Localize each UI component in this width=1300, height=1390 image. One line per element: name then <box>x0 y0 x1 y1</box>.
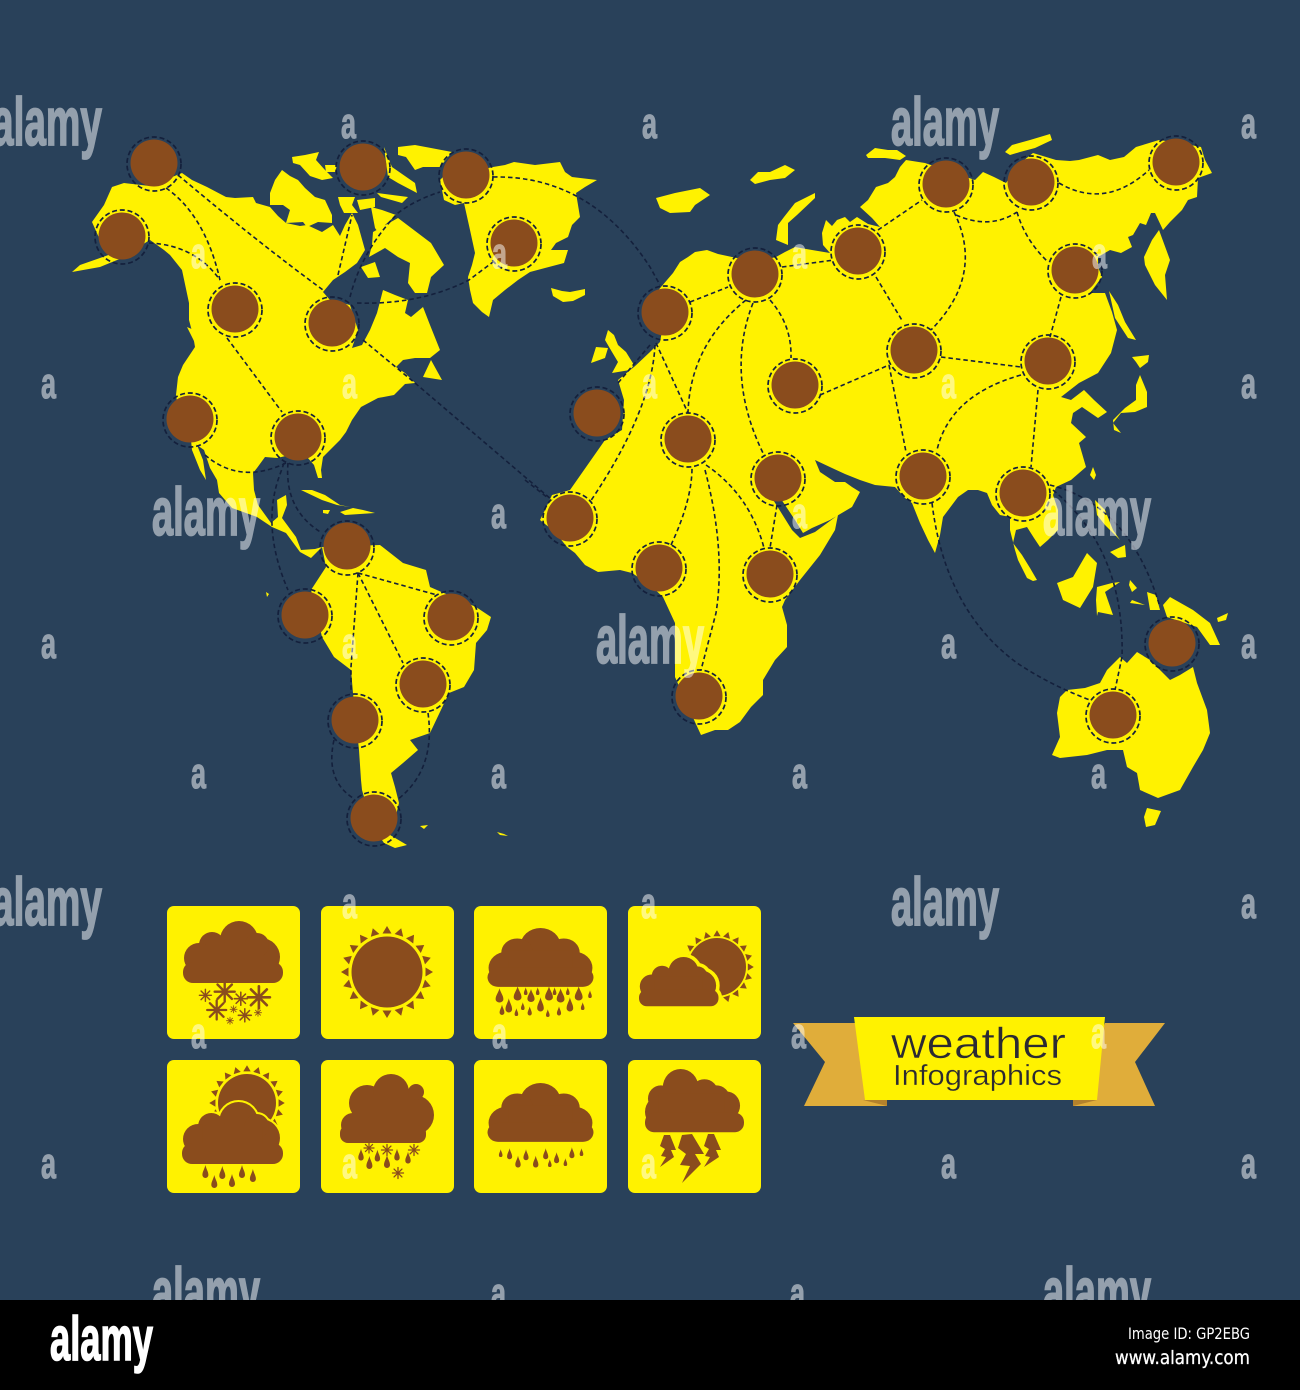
watermark: small a marks: a <box>191 749 206 798</box>
landmass: Novaya Zemlya <box>776 193 815 245</box>
icon tile: sun <box>321 906 454 1039</box>
landmass: North America <box>72 173 440 558</box>
watermark: small a marks: a <box>791 1009 806 1058</box>
watermark: small a marks: a <box>641 1139 656 1188</box>
landmass: Southeast Asian islands <box>1057 500 1160 616</box>
landmass: Baja California <box>191 440 206 480</box>
banner left tail <box>793 1023 887 1106</box>
landmass: South America <box>311 545 491 848</box>
banner centre <box>854 1017 1105 1100</box>
world map <box>72 134 1228 848</box>
dashed connection routes <box>149 170 1160 800</box>
footer website: www.alamy.com <box>1115 1347 1250 1369</box>
watermark: small a marks: a <box>941 619 956 668</box>
watermark: small a marks: a <box>342 619 357 668</box>
landmass: Canadian Arctic islands <box>270 145 452 380</box>
watermark: small a marks: a <box>492 229 507 278</box>
weather icon grid <box>167 906 761 1193</box>
watermark: small a marks: a <box>191 229 206 278</box>
watermark: small a marks: a <box>1091 1009 1106 1058</box>
watermark: small a marks: a <box>1241 879 1256 928</box>
landmass: Greenland <box>440 162 597 317</box>
watermark: large alamy marks <box>0 84 1151 1330</box>
banner title: weather: weather <box>890 1019 1066 1068</box>
watermark: small a marks: a <box>491 1269 506 1318</box>
watermark: small a marks: a <box>792 229 807 278</box>
landmass: Tasmania <box>1144 808 1161 827</box>
landmass: Eurasia and Africa <box>540 140 1212 735</box>
landmass: small southern islands <box>266 592 508 836</box>
landmass: Caribbean islands <box>301 490 375 515</box>
footer bar <box>0 1300 1300 1390</box>
watermark: small a marks: a <box>1241 359 1256 408</box>
landmass: Great Britain <box>605 330 634 373</box>
landmass: Iceland <box>551 288 585 302</box>
landmass: New Britain <box>1217 613 1228 622</box>
weather location markers: Europe, Africa, Asia and Oceania <box>543 136 1203 743</box>
watermark: small a marks: a <box>641 879 656 928</box>
watermark: small a marks: a <box>1092 229 1107 278</box>
banner right fold <box>1073 1100 1097 1106</box>
watermark: large alamy marks: alamy <box>1043 474 1151 550</box>
watermark: small a marks: a <box>1241 619 1256 668</box>
landmass: Ireland <box>591 347 608 363</box>
watermark: small a marks: a <box>790 1269 805 1318</box>
weather location markers: Americas <box>95 137 541 846</box>
watermark: small a marks: a <box>341 99 356 148</box>
landmass: Vancouver Island <box>187 327 201 345</box>
icon tile: sleet cloud <box>321 1060 454 1193</box>
watermark: small a marks: a <box>191 1009 206 1058</box>
icon tile: sun behind cloud <box>628 906 761 1039</box>
watermark: small a marks: a <box>41 1139 56 1188</box>
icon tile: light rain cloud <box>474 1060 607 1193</box>
landmass: Svalbard and Arctic islands <box>656 134 1052 213</box>
watermark: small a marks: a <box>792 749 807 798</box>
watermark: small a marks: a <box>792 489 807 538</box>
watermark: small a marks: a <box>941 359 956 408</box>
watermark: large alamy marks: alamy <box>891 864 999 940</box>
watermark: small a marks: a <box>1241 1139 1256 1188</box>
watermark: small a marks: a <box>491 489 506 538</box>
landmass: Sakhalin and Japan <box>1090 291 1149 480</box>
landmass: New Guinea <box>1163 597 1220 645</box>
watermark: small a marks: a <box>491 749 506 798</box>
watermark: small a marks: a <box>41 359 56 408</box>
watermark: large alamy marks: alamy <box>152 474 260 550</box>
watermark: large alamy marks: alamy <box>152 1254 260 1330</box>
watermark: small a marks: a <box>342 879 357 928</box>
icon tile: snow cloud <box>167 906 300 1039</box>
banner left fold <box>863 1100 887 1106</box>
landmass: Kamchatka <box>1144 230 1170 300</box>
watermark: small a marks: a <box>342 359 357 408</box>
watermark: small a marks: a <box>1091 749 1106 798</box>
watermark: small a marks: a <box>342 1139 357 1188</box>
watermark: small a marks: a <box>1241 99 1256 148</box>
icon tile: thunderstorm <box>628 1060 761 1193</box>
watermark: small a marks: a <box>492 1009 507 1058</box>
footer image id: Image ID: GP2EBG <box>1128 1324 1250 1343</box>
watermark: large alamy marks: alamy <box>1043 1254 1151 1330</box>
banner subtitle: Infographics: Infographics <box>893 1060 1062 1092</box>
icon tile: heavy rain cloud <box>474 906 607 1039</box>
watermark: small a marks: a <box>642 359 657 408</box>
ribbon banner <box>793 1017 1165 1106</box>
icon tile: sun behind rain cloud <box>167 1060 300 1193</box>
banner right tail <box>1073 1023 1165 1106</box>
landmass: Australia <box>1052 652 1210 798</box>
footer logo: alamy: alamy <box>50 1305 153 1374</box>
watermark: small a marks: a <box>642 99 657 148</box>
watermark: small a marks: a <box>941 1139 956 1188</box>
watermark: large alamy marks: alamy <box>596 602 704 678</box>
watermark: small a marks: a <box>41 619 56 668</box>
watermark: large alamy marks: alamy <box>891 84 999 160</box>
